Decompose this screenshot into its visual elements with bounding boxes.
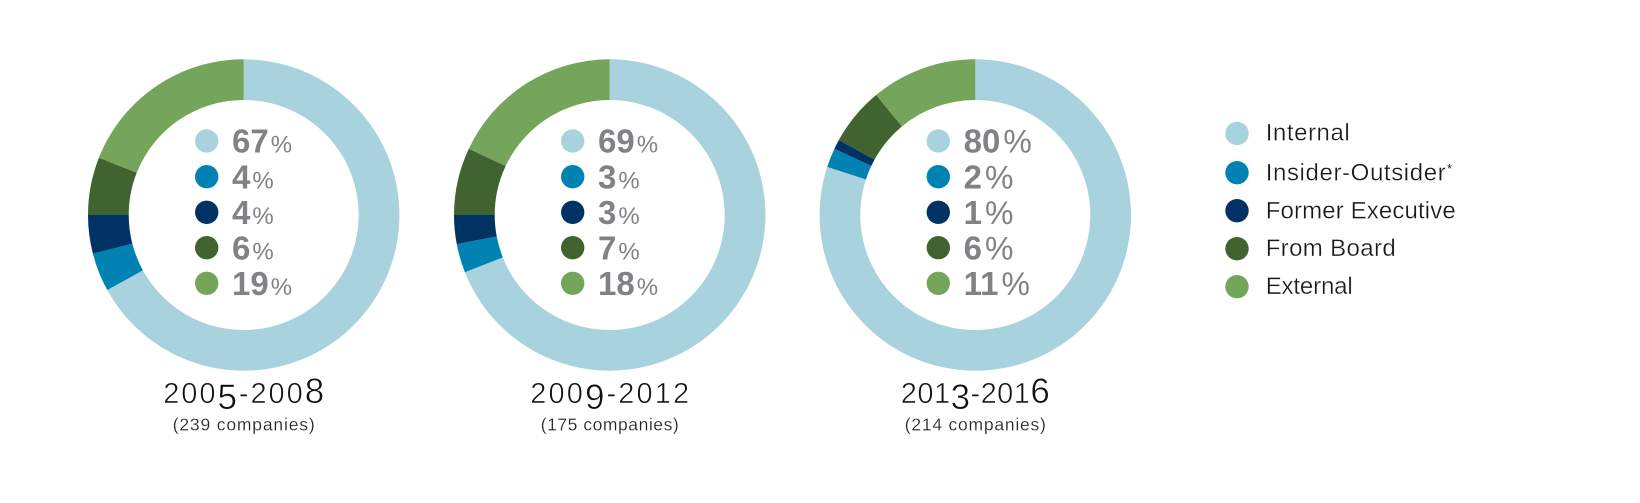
- values list 2013-2016: 6%: [964, 230, 1013, 267]
- values list 2005-2008: 67%: [232, 123, 292, 160]
- segment: insider-outsider 3%: [457, 237, 503, 272]
- values list 2009-2012: 18%: [598, 265, 658, 302]
- panel: donut 2009-2012: [454, 59, 765, 435]
- values list 2013-2016: 1%: [964, 194, 1013, 231]
- company count 214: (214 companies): [905, 415, 1046, 435]
- period label 2005-2008: -200: [239, 378, 303, 410]
- values list 2009-2012: 3%: [598, 194, 640, 231]
- period label 2013-2016: 201: [901, 378, 950, 410]
- values list 2005-2008: 4%: [232, 158, 274, 195]
- segment: former executive 4%: [88, 215, 132, 254]
- values list 2013-2016: 2%: [964, 158, 1013, 195]
- period label 2009-2012: 200: [530, 378, 583, 410]
- segment: from board 6%: [839, 95, 902, 160]
- segment: from board 7%: [454, 149, 506, 215]
- company count 175: (175 companies): [541, 415, 679, 435]
- segment: internal 69%: [465, 59, 765, 371]
- values list 2005-2008: [195, 123, 292, 302]
- values list 2013-2016: [927, 123, 1032, 302]
- panel: donut 2005-2008: [88, 59, 399, 435]
- values list 2005-2008: 19%: [232, 265, 292, 302]
- values list 2013-2016: 80%: [964, 123, 1032, 160]
- legend item: External: [1225, 273, 1353, 300]
- company count 239: (239 companies): [173, 415, 315, 435]
- period label 2005-2008: 200: [163, 378, 216, 410]
- period label 2013-2016: 3: [951, 378, 970, 417]
- segment: former executive 1%: [834, 140, 875, 166]
- segment: from board 6%: [88, 158, 137, 215]
- values list 2005-2008: 4%: [232, 194, 274, 231]
- period label 2009-2012: 9: [585, 378, 604, 417]
- period label 2005-2008: 5: [217, 378, 237, 417]
- legend item: Internal: [1225, 120, 1350, 147]
- segment: former executive 3%: [454, 215, 497, 244]
- period label 2013-2016: 6: [1030, 372, 1050, 411]
- legend item: Internal: Internal: [1266, 120, 1350, 147]
- donut chart 2013-2016: [820, 59, 1131, 371]
- period label 2013-2016: -201: [970, 378, 1030, 410]
- segment: insider-outsider 4%: [93, 244, 143, 290]
- values list 2013-2016: 11%: [964, 265, 1030, 302]
- segment: external 18%: [469, 59, 610, 166]
- legend item: Insider-Outsider: *: [1447, 161, 1452, 176]
- legend item: External: External: [1266, 273, 1353, 300]
- donut chart 2009-2012: [454, 59, 765, 371]
- values list 2005-2008: 6%: [232, 230, 274, 267]
- values list 2009-2012: 3%: [598, 158, 640, 195]
- period label 2005-2008: 8: [305, 372, 324, 411]
- donut chart 2005-2008: [88, 59, 399, 371]
- legend: [1225, 120, 1456, 300]
- period label 2009-2012: -2012: [607, 378, 689, 410]
- segment: insider-outsider 2%: [827, 149, 871, 179]
- legend item: From Board: From Board: [1266, 235, 1396, 262]
- segment: internal 67%: [107, 59, 399, 371]
- legend item: Former Executive: Former Executive: [1266, 197, 1456, 224]
- segment: external 19%: [99, 59, 244, 173]
- panel: donut 2013-2016: [820, 59, 1131, 435]
- values list 2009-2012: [561, 123, 658, 302]
- legend item: Insider-Outsider: Insider-Outsider: [1266, 159, 1446, 186]
- values list 2009-2012: 69%: [598, 123, 658, 160]
- segment: internal 80%: [820, 59, 1131, 371]
- values list 2009-2012: 7%: [598, 230, 640, 267]
- segment: external 11%: [876, 59, 975, 126]
